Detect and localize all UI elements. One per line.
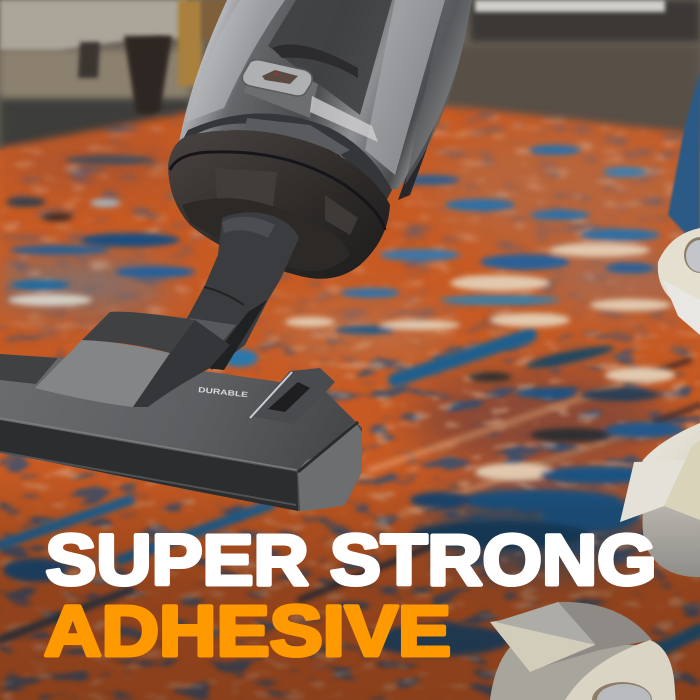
tape roll: right middle xyxy=(620,423,700,577)
switch xyxy=(250,368,335,424)
vacuum: dark canister base xyxy=(168,130,390,279)
nozzle hood xyxy=(35,340,170,407)
vacuum: neck pipe xyxy=(178,212,299,370)
title: SUPER STRONG ADHESIVE xyxy=(44,522,656,672)
vacuum: floor head xyxy=(0,312,362,511)
person's leg (denim) xyxy=(668,70,700,247)
bands xyxy=(310,96,378,142)
near mottled rug pattern xyxy=(0,280,700,700)
vacuum: transparent canister xyxy=(178,0,472,205)
upper cup outline xyxy=(272,44,358,78)
background: room xyxy=(0,0,700,150)
title line 1: SUPER STRONG xyxy=(46,522,656,600)
brand mark: DURABLE xyxy=(198,385,248,399)
tape roll: bottom xyxy=(490,602,676,700)
darkening toward the bottom xyxy=(0,470,700,700)
diagonal rug bands xyxy=(0,335,700,700)
far mottled rug pattern xyxy=(0,104,698,361)
sofa xyxy=(0,0,186,115)
tape roll: top right xyxy=(658,228,700,335)
title line 2: ADHESIVE xyxy=(44,592,451,672)
back strap xyxy=(398,70,452,200)
placed blue and dark blobs, near xyxy=(3,342,685,656)
release button xyxy=(242,60,312,96)
soft colour zones xyxy=(0,130,700,570)
placed blue and dark blobs, far xyxy=(6,145,670,334)
